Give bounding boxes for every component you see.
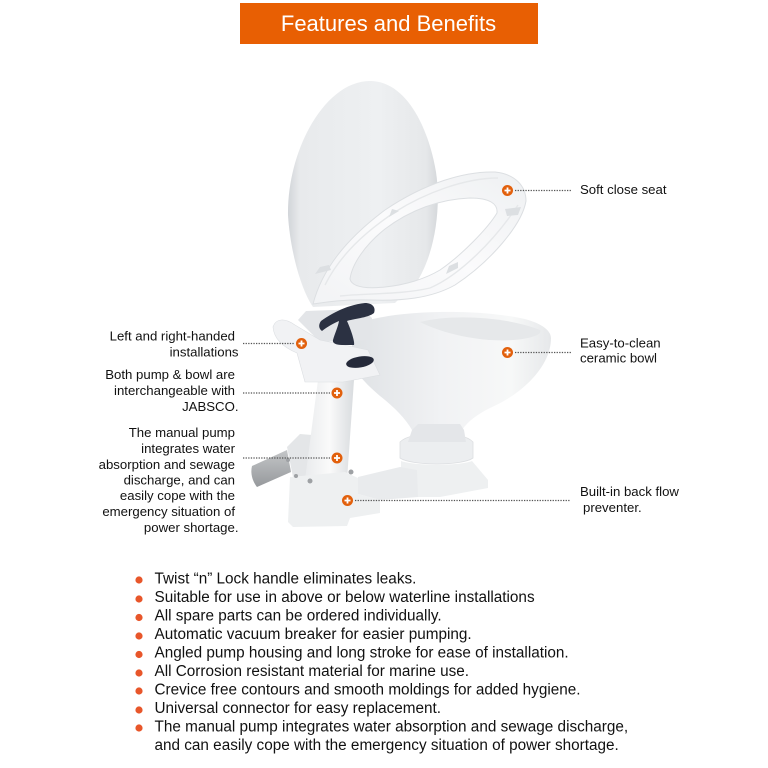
lid (288, 81, 438, 307)
hinge platform (298, 309, 372, 342)
feature bullet list: All spare parts can be ordered individually. (154, 608, 442, 624)
pump base (288, 472, 380, 527)
callout: soft close seat: Soft close seat (580, 182, 667, 197)
pedestal (400, 433, 473, 464)
feature bullet list: Twist “n” Lock handle eliminates leaks. (154, 570, 416, 588)
callout: left and right-handed (110, 328, 307, 360)
toilet illustration (251, 81, 551, 527)
handle (319, 303, 375, 345)
callout: manual pump: emergency situation of (102, 504, 235, 519)
feature bullet list: Automatic vacuum breaker for easier pumping. (154, 626, 472, 643)
callout: manual pump: easily cope with the (120, 488, 235, 503)
callout: manual pump: absorption and sewage (99, 457, 235, 472)
callout: back flow preventer: Built-in back flow (580, 484, 679, 499)
feature bullet list: All Corrosion resistant material for marine use. (154, 663, 469, 680)
callout: back flow preventer (342, 484, 679, 515)
bolts (308, 478, 312, 484)
title banner: Features and Benefits (281, 11, 496, 36)
bowl (352, 312, 551, 430)
callout: interchangeable (105, 367, 342, 414)
callout: interchangeable: Both pump & bowl are (105, 367, 235, 382)
callout: manual pump (99, 425, 342, 535)
callout: back flow preventer: preventer. (583, 500, 642, 515)
callout: ceramic bowl (502, 336, 661, 366)
callout: interchangeable: JABSCO. (182, 399, 238, 414)
callout: manual pump: discharge, and can (124, 472, 235, 488)
callout: left and right-handed: installations (170, 344, 239, 360)
callout: ceramic bowl: Easy-to-clean (580, 336, 661, 350)
callout: left and right-handed: Left and right-handed (110, 328, 235, 344)
callout: manual pump: power shortage. (144, 520, 238, 535)
label badge (345, 354, 375, 370)
seat rim shading (325, 178, 518, 296)
callout: manual pump: integrates water (141, 441, 236, 456)
inlet tube (251, 450, 291, 487)
feature bullet list: Universal connector for easy replacement. (154, 700, 441, 717)
pump column (305, 380, 354, 480)
discharge arm (358, 467, 418, 500)
callout: manual pump: The manual pump (129, 425, 235, 440)
feature bullet list: Suitable for use in above or below waterline installations (154, 589, 535, 606)
callout: ceramic bowl: ceramic bowl (580, 350, 657, 366)
title banner (240, 3, 538, 44)
pump head (273, 320, 380, 382)
callout: soft close seat (502, 182, 667, 197)
inlet connector (287, 434, 312, 477)
feature bullet list: The manual pump integrates water absorption and sewage discharge, (154, 718, 628, 736)
feature bullet list: Angled pump housing and long stroke for ease of installation. (154, 644, 569, 662)
seat (313, 172, 526, 304)
feature bullet list: and can easily cope with the emergency situation of power shortage. (154, 737, 619, 754)
callout: interchangeable: interchangeable with (114, 383, 235, 398)
feature bullet list: Crevice free contours and smooth moldings for added hygiene. (154, 682, 581, 698)
seat bumpers (315, 207, 521, 274)
feature bullet list (135, 570, 628, 754)
